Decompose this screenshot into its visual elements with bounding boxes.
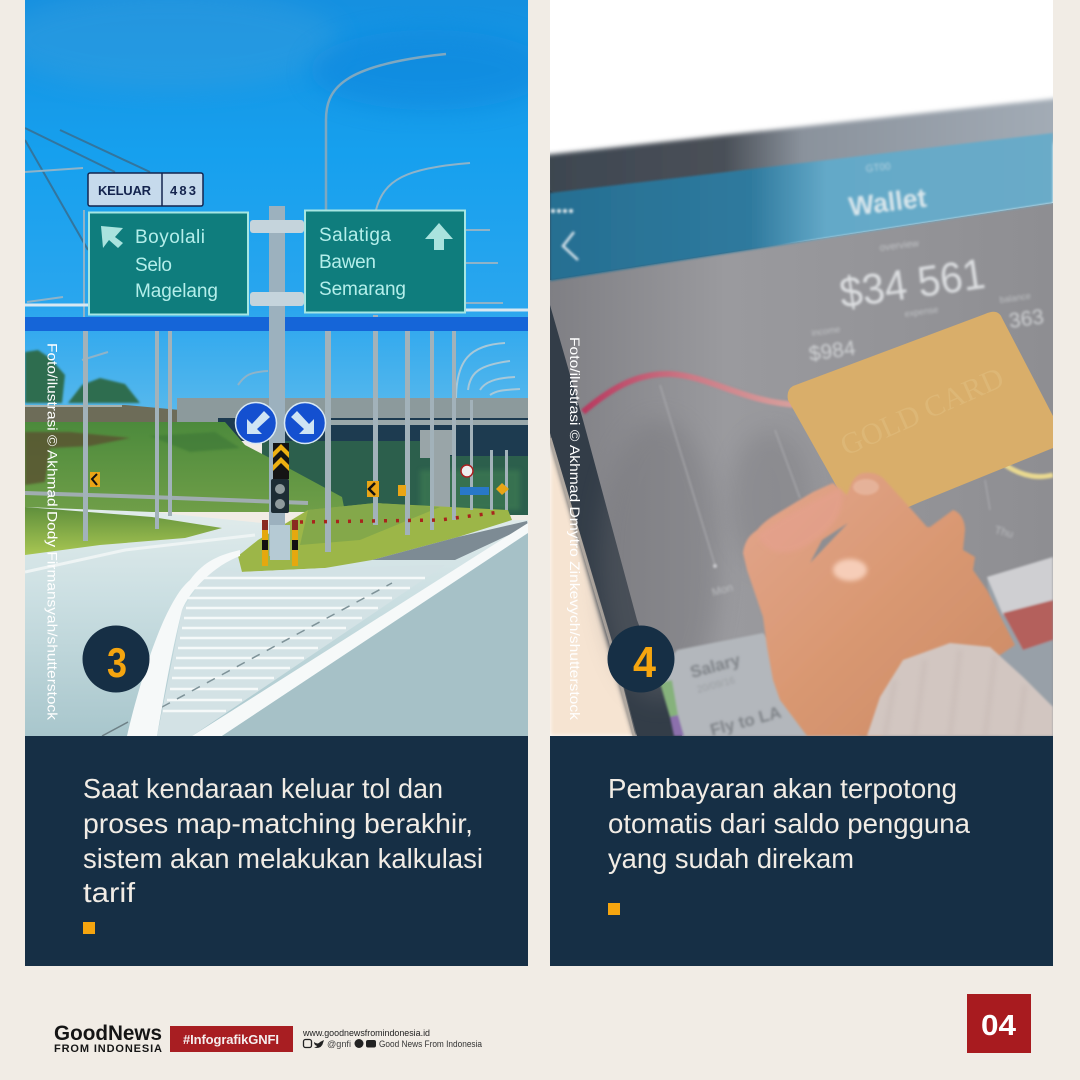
sign: Boyolali Selo Magelang: Boyolali	[135, 227, 205, 248]
guard rail	[25, 493, 308, 503]
sign: Salatiga Bawen Semarang	[305, 210, 465, 312]
wallet header	[550, 133, 1053, 281]
hashtag badge	[170, 1026, 293, 1052]
wallet screen content: Mon	[711, 582, 734, 599]
wallet screen content: balance	[999, 291, 1032, 305]
wallet screen content: income	[811, 324, 841, 338]
sweater sleeve	[867, 643, 1053, 736]
wallet screen content: overview	[879, 238, 920, 254]
social links: Good News From Indonesia	[379, 1039, 482, 1049]
number badge 4	[608, 626, 674, 692]
number badge 3	[82, 626, 150, 692]
chevron small signs	[90, 465, 509, 497]
step 3 description	[83, 773, 483, 908]
sign: exit 483: KELUAR	[98, 183, 152, 198]
logo: GoodNews From Indonesia	[54, 1022, 162, 1055]
gold card: GOLD CARD	[835, 361, 1009, 462]
photo credit: step 4: Foto/ilustrasi © Akhmad Dmytro Zinkevych/shutterstock	[567, 337, 583, 721]
bridge	[177, 398, 528, 518]
number badge 4: 4	[633, 638, 656, 687]
step 4 description	[608, 773, 970, 874]
keep-left and keep-right signs	[236, 402, 326, 444]
social links: www.goodnewsfromindonesia.id	[302, 1028, 430, 1038]
left grass patch	[25, 507, 222, 555]
logo: GoodNews From Indonesia: GoodNews	[54, 1022, 162, 1045]
accent square	[608, 903, 620, 915]
step 3 description: Saat kendaraan keluar tol dan	[83, 773, 443, 804]
panel: step 4 photo of hand holding gold card: Fly to LA	[708, 703, 783, 740]
panel: step 3 photo of toll road exit	[0, 0, 550, 736]
main sign pole	[269, 206, 285, 556]
light poles	[83, 315, 508, 552]
lower transaction list	[660, 557, 1053, 736]
overhead wires and lamp posts	[25, 54, 520, 400]
panel: step 4 photo of hand holding gold card: 20/09/16	[696, 675, 737, 696]
photo credit: step 3: Foto/ilustrasi © Akhmad Dody Firmansyah/shutterstock	[44, 343, 60, 721]
striped gore area	[157, 568, 394, 736]
step 3 description: proses map-matching berakhir,	[83, 808, 473, 839]
social links	[302, 1028, 482, 1049]
dirt and rail behind hill	[25, 405, 177, 422]
sign: Salatiga Bawen Semarang: Semarang	[319, 279, 406, 300]
wallet screen content	[551, 161, 1045, 599]
wallet screen content: $984	[807, 337, 857, 366]
hand	[743, 473, 1015, 736]
sign: exit 483	[88, 173, 203, 206]
logo: GoodNews From Indonesia: FROM INDONESIA	[54, 1043, 162, 1055]
median grass	[238, 503, 512, 572]
step 3 description: sistem akan melakukan kalkulasi	[83, 843, 483, 874]
dashed lane seam	[162, 583, 392, 707]
sign: Boyolali Selo Magelang: Magelang	[135, 281, 218, 302]
asphalt wedge	[372, 521, 528, 560]
step 4 description: yang sudah direkam	[608, 843, 854, 874]
page number: 04	[981, 1010, 1016, 1042]
sign: Salatiga Bawen Semarang: Bawen	[319, 252, 376, 273]
social links: @gnfi	[327, 1039, 351, 1049]
panel: step 3 text	[25, 736, 528, 966]
chevron post and signal	[262, 443, 298, 566]
wallet screen content: Wallet	[847, 183, 928, 222]
road base	[25, 507, 528, 736]
panel: step 4 photo of hand holding gold card: Salary	[688, 650, 743, 682]
blue pipe	[25, 317, 528, 331]
panel: step 4 text	[550, 736, 1053, 966]
number badge 3: 3	[107, 639, 127, 686]
wallet screen content: $34 561	[837, 250, 988, 318]
step 4 description: otomatis dari saldo pengguna	[608, 808, 970, 839]
page number	[967, 994, 1031, 1053]
wallet screen content: expense	[904, 304, 939, 319]
step 3 description: tarif	[83, 877, 135, 908]
red dotted markers	[300, 512, 500, 522]
accent square	[83, 922, 95, 934]
hashtag badge: #InfografikGNFI	[183, 1032, 279, 1047]
wallet screen content: GT00	[865, 161, 892, 175]
white rail behind pipe	[25, 305, 528, 310]
sign: exit 483: 483	[170, 183, 196, 198]
white road lines	[127, 550, 240, 736]
wallet screen content: Thu	[993, 524, 1015, 541]
tablet bezel	[545, 98, 1060, 736]
sign: Boyolali Selo Magelang: Selo	[135, 255, 172, 276]
chart lines	[583, 374, 1053, 568]
wallet screen content: 363	[1007, 305, 1045, 333]
step 4 description: Pembayaran akan terpotong	[608, 773, 957, 804]
gold card	[788, 312, 1053, 528]
grass hill	[25, 422, 345, 512]
sign: Salatiga Bawen Semarang: Salatiga	[319, 225, 391, 246]
panel: step 4 photo of hand holding gold card	[545, 0, 1060, 740]
far trees	[25, 350, 140, 403]
cream backdrop	[550, 420, 640, 736]
sign: Boyolali Selo Magelang	[89, 212, 248, 314]
tablet screen	[550, 203, 1053, 736]
